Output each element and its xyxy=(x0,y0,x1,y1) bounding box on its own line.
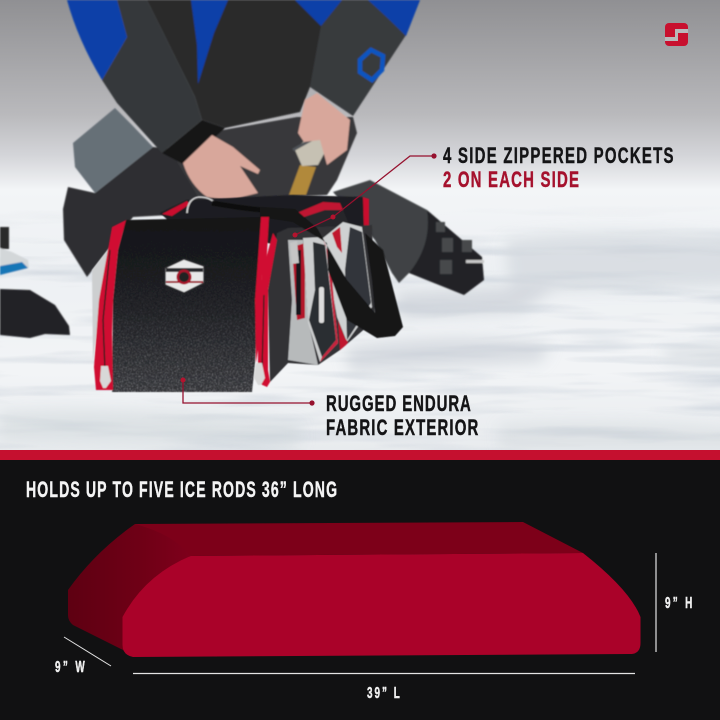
zipper pulls xyxy=(100,366,111,388)
red divider band xyxy=(0,450,720,460)
grey pant flap xyxy=(73,108,153,193)
left grey gusset xyxy=(92,247,110,360)
sleeve logo xyxy=(360,50,383,80)
jacket torso xyxy=(146,0,322,129)
pocket logo xyxy=(319,287,324,323)
tackle bag xyxy=(92,195,403,395)
first pocket rim xyxy=(303,237,338,362)
blue fishing gear left edge xyxy=(0,227,29,275)
right red zipper xyxy=(255,217,269,363)
rod and reel xyxy=(289,165,316,195)
bag badge xyxy=(165,259,204,293)
bag top red panel xyxy=(306,210,348,226)
callout text: 2 on each side: 2 ON EACH SIDE xyxy=(443,167,579,192)
right hand xyxy=(298,93,350,165)
callout: fabric leader line xyxy=(180,378,315,406)
front panel xyxy=(112,217,262,392)
panel snow grain xyxy=(111,228,260,392)
top ring handle xyxy=(187,197,215,213)
silver gusset xyxy=(288,240,318,365)
panel: ice fishing photo xyxy=(0,0,720,450)
dimension: height xyxy=(656,553,692,652)
snow ground xyxy=(0,190,720,450)
boot xyxy=(333,180,484,295)
dimension: width: 9” W xyxy=(55,658,85,676)
lap xyxy=(170,117,357,200)
second pocket rim xyxy=(323,222,372,342)
dark snow pants xyxy=(62,146,267,278)
3D rod compartment shape xyxy=(68,522,640,657)
waist band xyxy=(162,120,225,165)
dimension: height: 9” H xyxy=(665,594,692,612)
dimension: width xyxy=(55,637,111,676)
panel: dimensions xyxy=(0,460,720,720)
compartment front face xyxy=(122,553,640,657)
black glove left edge xyxy=(0,289,70,338)
pocket zipper xyxy=(292,243,305,320)
blurred grey background xyxy=(0,0,720,190)
left hand xyxy=(183,135,260,200)
callout text: 4 side zippered pockets: 4 SIDE ZIPPERED POCKETS xyxy=(443,143,674,168)
blue jacket panels xyxy=(67,0,127,80)
compartment side face xyxy=(68,524,190,657)
shoulder strap xyxy=(260,207,403,338)
compartment top face xyxy=(135,522,583,560)
person: kneeling angler xyxy=(63,0,420,277)
dimension: length: 39” L xyxy=(367,684,400,702)
left sleeve xyxy=(102,0,202,153)
callout text: fabric exterior: FABRIC EXTERIOR xyxy=(326,415,479,440)
bag top and back xyxy=(160,194,364,244)
callout text: rugged endura: RUGGED ENDURA xyxy=(326,391,471,416)
heading: holds up to five ice rods: HOLDS UP TO FIVE ICE RODS 36” LONG xyxy=(26,477,337,502)
left red zipper xyxy=(94,220,126,390)
right sleeve xyxy=(310,0,420,116)
icon: brand S logo xyxy=(665,23,688,46)
side body xyxy=(268,228,288,382)
callout: side pockets leader line xyxy=(292,153,437,238)
